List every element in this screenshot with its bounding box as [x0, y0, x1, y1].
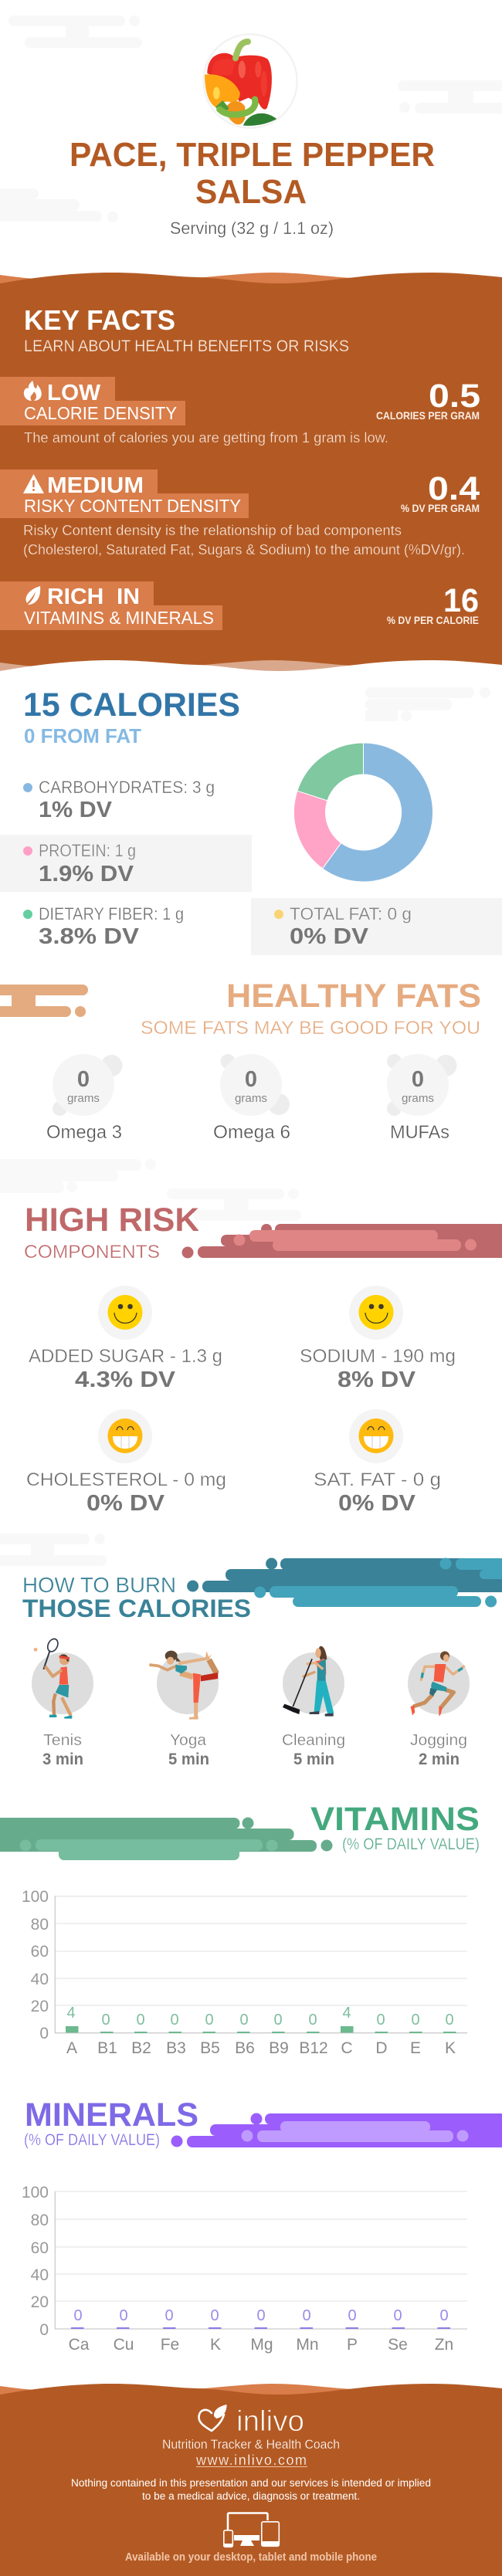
bar chart: minerals: P [347, 2336, 358, 2354]
legend: protein: PROTEIN: 1 g [39, 841, 136, 860]
bar chart: minerals: Zn [435, 2336, 453, 2354]
legend: total fat [274, 904, 412, 949]
fact: low calorie density: The amount of calories you are getting from 1 gram is low. [24, 430, 388, 446]
bar chart: minerals: 0 [302, 2307, 311, 2324]
fact: rich in vitamins and minerals: VITAMINS & MINERALS [24, 608, 214, 628]
heading: high risk [24, 1202, 199, 1263]
bar chart: vitamins: 20 [31, 1998, 49, 2015]
heading: how to burn: HOW TO BURN [22, 1573, 176, 1597]
bar chart: minerals: 0 [210, 2307, 219, 2324]
activity: jogging: Jogging [410, 1732, 467, 1749]
bar chart: vitamins [22, 1888, 467, 2057]
stat: mufas: MUFAs [390, 1122, 449, 1143]
bar chart: vitamins: 0 [205, 2012, 214, 2029]
panel: high risk components [0, 1159, 502, 1516]
heading: minerals: MINERALS [25, 2096, 198, 2134]
fact: rich in vitamins and minerals: RICH IN [47, 585, 140, 609]
bar chart: vitamins: 100 [22, 1888, 49, 1906]
heading: calories [23, 686, 240, 747]
legend: dietary fiber: DIETARY FIBER: 1 g [39, 904, 184, 924]
icon: flame [24, 381, 42, 401]
bar chart: minerals: 0 [73, 2307, 83, 2324]
icon: grinning face [108, 1418, 142, 1453]
heading: healthy fats [141, 978, 481, 1039]
bar chart: vitamins: B3 [166, 2039, 186, 2057]
icon: yoga pose [149, 1651, 218, 1720]
bar chart: vitamins: D [375, 2039, 388, 2057]
legend: carbohydrates: 1% DV [39, 798, 113, 822]
header panel [71, 33, 434, 238]
decoration: teal bars [187, 1558, 502, 1608]
activity: jogging [408, 1651, 470, 1768]
icon: devices [223, 2513, 279, 2547]
bar chart: vitamins: E [410, 2039, 421, 2057]
component: saturated fat [314, 1409, 441, 1516]
serving size: Serving (32 g / 1.1 oz) [170, 219, 334, 238]
heading: healthy fats: HEALTHY FATS [226, 978, 481, 1015]
heading: high risk: COMPONENTS [24, 1242, 160, 1263]
component: saturated fat: SAT. FAT - 0 g [314, 1469, 441, 1490]
legend: carbohydrates [23, 778, 215, 822]
icon: smiling face [358, 1295, 394, 1330]
fact: low calorie density [0, 377, 480, 446]
bar chart: vitamins: B9 [269, 2039, 289, 2057]
stat: omega 6: 0 [245, 1067, 257, 1092]
stat: omega 6: Omega 6 [213, 1122, 290, 1143]
icon: smiling face [108, 1295, 142, 1330]
bar chart: minerals: Fe [161, 2336, 179, 2354]
title [70, 136, 435, 211]
component: added sugar: 4.3% DV [75, 1368, 176, 1392]
bar chart: minerals: 0 [393, 2307, 402, 2324]
icon: pepper illustration [203, 34, 297, 128]
activity: yoga [149, 1651, 219, 1768]
panel: vitamins [0, 1801, 480, 2057]
activity: cleaning: Cleaning [282, 1732, 345, 1749]
bar chart: minerals: 0 [439, 2307, 449, 2324]
panel: how to burn calories [0, 1534, 502, 1768]
heading: key facts: KEY FACTS [24, 304, 175, 336]
component: sodium [300, 1286, 456, 1392]
bar chart: minerals: 80 [31, 2212, 49, 2229]
disclaimer: Nothing contained in this presentation and our services is intended or implied [71, 2477, 431, 2489]
heading: calories: 15 CALORIES [23, 686, 240, 724]
panel: calories [0, 686, 502, 955]
stat: omega 3: 0 [77, 1067, 90, 1092]
logo: inlivo: inlivo [236, 2405, 304, 2438]
bar chart: minerals: Ca [69, 2336, 90, 2354]
fact: medium risky content density: Risky Content density is the relationship of bad components [23, 523, 402, 538]
fact: low calorie density: CALORIES PER GRAM [376, 409, 480, 422]
decoration: purple bars [171, 2113, 502, 2147]
decoration: green bars [0, 1818, 332, 1860]
heading: vitamins: (% OF DAILY VALUE) [342, 1835, 480, 1853]
disclaimer [71, 2477, 431, 2502]
fact: medium risky content density: 0.4 [428, 470, 480, 507]
heading: high risk: HIGH RISK [25, 1202, 199, 1239]
stat: mufas: 0 [412, 1067, 424, 1092]
fact: rich in vitamins and minerals: 16 [443, 582, 479, 619]
bar chart: vitamins: 0 [39, 2025, 49, 2042]
stat: omega 3 [46, 1054, 122, 1143]
stat: omega 6: grams [235, 1092, 267, 1105]
bar chart: minerals: Se [388, 2336, 408, 2354]
fact: medium risky content density: % DV PER GRAM [401, 502, 480, 514]
icon: leaf [26, 586, 40, 605]
stat: omega 6 [213, 1054, 290, 1143]
activity: tennis: 3 min [42, 1751, 83, 1768]
availability note: Available on your desktop, tablet and mobile phone [125, 2551, 377, 2564]
bar chart: vitamins: 0 [136, 2012, 145, 2029]
fact: rich in vitamins and minerals: % DV PER CALORIE [387, 614, 479, 626]
bar chart: vitamins: 0 [273, 2012, 283, 2029]
icon: warning triangle [23, 474, 44, 493]
bar chart: minerals: Mg [250, 2336, 273, 2354]
bar chart: vitamins: K [445, 2039, 456, 2057]
bar chart: minerals: 0 [39, 2321, 49, 2339]
icon: grinning face [358, 1418, 394, 1453]
heading: vitamins: VITAMINS [310, 1801, 480, 1838]
stat: mufas: grams [402, 1092, 434, 1105]
stat: omega 3: Omega 3 [46, 1122, 122, 1143]
component: sodium: 8% DV [337, 1368, 416, 1392]
bar chart: minerals: K [210, 2336, 221, 2354]
component: cholesterol: 0% DV [86, 1491, 165, 1516]
activity: tennis: Tenis [43, 1732, 82, 1749]
fact: medium risky content density: (Cholesterol, Saturated Fat, Sugars & Sodium) to the amount (%DV/gr). [23, 542, 465, 558]
panel: footer [0, 2384, 502, 2576]
icon: jogger [411, 1651, 465, 1717]
bar chart: vitamins: B12 [299, 2039, 328, 2057]
heading: how to burn: THOSE CALORIES [22, 1595, 251, 1622]
activity: tennis [32, 1637, 93, 1768]
fact: medium risky content density: MEDIUM [47, 473, 144, 498]
fact: medium risky content density [0, 469, 480, 558]
fact: low calorie density: CALORIE DENSITY [24, 403, 177, 423]
disclaimer: to be a medical advice, diagnosis or treatment. [142, 2490, 360, 2502]
fact: low calorie density: 0.5 [429, 378, 480, 415]
bar chart: minerals: Mn [296, 2336, 319, 2354]
activity: yoga: Yoga [170, 1732, 207, 1749]
heading: how to burn [22, 1573, 251, 1622]
panel: minerals [22, 2096, 502, 2354]
heading: key facts: LEARN ABOUT HEALTH BENEFITS OR RISKS [24, 337, 349, 355]
bar chart: vitamins: A [66, 2039, 77, 2057]
bar chart: vitamins: B6 [235, 2039, 255, 2057]
stat: omega 3: grams [67, 1092, 100, 1105]
bar chart: minerals: 0 [256, 2307, 266, 2324]
bar chart: vitamins: 0 [170, 2012, 179, 2029]
logo: inlivo [198, 2405, 304, 2438]
decoration: red bars [182, 1224, 502, 1259]
legend: carbohydrates: CARBOHYDRATES: 3 g [39, 778, 215, 797]
bar chart: vitamins: 4 [66, 2005, 76, 2022]
website link: www.inlivo.com [195, 2452, 307, 2468]
bar chart: minerals: 0 [119, 2307, 128, 2324]
component: cholesterol [26, 1409, 226, 1516]
fact: low calorie density: LOW [47, 381, 101, 405]
icon: person sweeping [283, 1646, 334, 1717]
heading: calories: 0 FROM FAT [24, 724, 141, 747]
bar chart: vitamins: 0 [376, 2012, 385, 2029]
legend: dietary fiber: 3.8% DV [39, 924, 140, 949]
panel: healthy fats [0, 978, 481, 1143]
decoration: tan bars [0, 985, 88, 1017]
bar chart: minerals: 0 [165, 2307, 174, 2324]
component: sodium: SODIUM - 190 mg [300, 1346, 456, 1367]
legend: total fat: TOTAL FAT: 0 g [290, 904, 412, 924]
bar chart: vitamins: 60 [31, 1943, 49, 1961]
bar chart: minerals: 20 [31, 2293, 49, 2311]
icon: heart with leaf [198, 2405, 227, 2431]
activity: yoga: 5 min [168, 1751, 209, 1768]
donut chart [294, 743, 433, 882]
legend: dietary fiber [23, 904, 184, 949]
heading: healthy fats: SOME FATS MAY BE GOOD FOR YOU [141, 1018, 480, 1039]
bar chart: vitamins: 4 [342, 2005, 351, 2022]
stat: mufas [387, 1054, 457, 1143]
bar chart: minerals [22, 2184, 467, 2354]
activity: jogging: 2 min [419, 1751, 460, 1768]
bar chart: vitamins: B1 [97, 2039, 117, 2057]
fact: medium risky content density: RISKY CONTENT DENSITY [24, 496, 241, 516]
bar chart: vitamins: 40 [31, 1971, 49, 1988]
heading: key facts [24, 304, 349, 355]
bar chart: minerals: 60 [31, 2239, 49, 2257]
activity: cleaning: 5 min [293, 1751, 334, 1768]
title: SALSA [195, 173, 307, 211]
bar chart: minerals: 40 [31, 2266, 49, 2284]
legend: total fat: 0% DV [290, 924, 369, 949]
bar chart: vitamins: 0 [411, 2012, 420, 2029]
panel: key facts [0, 273, 502, 681]
heading: vitamins [310, 1801, 480, 1853]
fact: rich in vitamins and minerals [0, 581, 479, 630]
bar chart: vitamins: 0 [445, 2012, 454, 2029]
bar chart: vitamins: 0 [308, 2012, 317, 2029]
legend: protein: 1.9% DV [39, 862, 134, 886]
bar chart: vitamins: B5 [200, 2039, 220, 2057]
legend: protein [23, 841, 136, 886]
bar chart: minerals: 100 [22, 2184, 49, 2201]
bar chart: vitamins: B2 [131, 2039, 151, 2057]
icon: tennis player [34, 1637, 72, 1719]
title: PACE, TRIPLE PEPPER [70, 136, 435, 174]
activity: cleaning [282, 1646, 345, 1768]
tagline: Nutrition Tracker & Health Coach [162, 2437, 340, 2452]
component: added sugar [29, 1286, 222, 1392]
heading: minerals: (% OF DAILY VALUE) [24, 2131, 160, 2149]
bar chart: vitamins: C [341, 2039, 353, 2057]
component: cholesterol: CHOLESTEROL - 0 mg [26, 1469, 226, 1490]
component: added sugar: ADDED SUGAR - 1.3 g [29, 1346, 222, 1367]
bar chart: minerals: 0 [348, 2307, 357, 2324]
bar chart: vitamins: 80 [31, 1916, 49, 1934]
component: saturated fat: 0% DV [338, 1491, 416, 1516]
bar chart: vitamins: 0 [101, 2012, 110, 2029]
bar chart: vitamins: 0 [239, 2012, 249, 2029]
bar chart: minerals: Cu [114, 2336, 134, 2354]
